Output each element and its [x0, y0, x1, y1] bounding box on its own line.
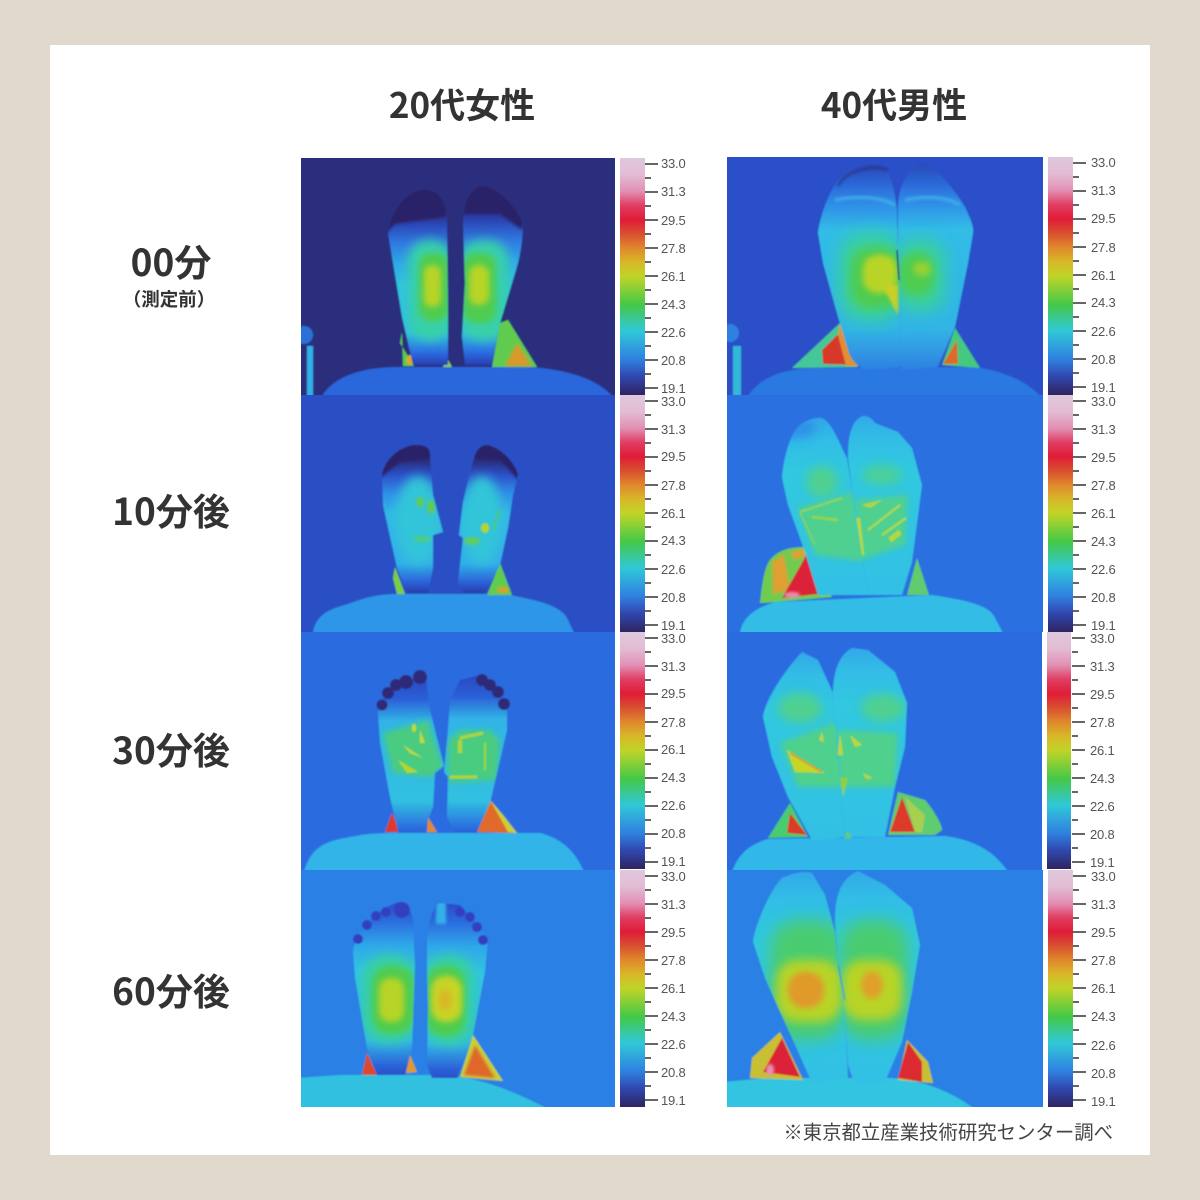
- scale: man 10 min: 20.8: [1091, 590, 1116, 605]
- scale: man 60 min: 19.1: [1091, 1094, 1116, 1109]
- row label: 60 min: 60分後: [112, 962, 230, 1016]
- scale: woman 00 min: 22.6: [661, 325, 686, 340]
- scale: woman 60 min: 24.3: [661, 1009, 686, 1024]
- scale: woman 30 min: 27.8: [661, 715, 686, 730]
- scale: woman 10 min: [620, 394, 686, 633]
- scale: woman 00 min: 31.3: [661, 184, 686, 199]
- scale: man 30 min: 26.1: [1090, 743, 1115, 758]
- scale: man 30 min: 22.6: [1090, 799, 1115, 814]
- thermal image: man 00 min: [720, 150, 1050, 400]
- scale: woman 30 min: [620, 631, 686, 869]
- scale: man 60 min: 29.5: [1091, 925, 1116, 940]
- scale: woman 60 min: 27.8: [661, 953, 686, 968]
- scale: woman 30 min: 19.1: [661, 854, 686, 869]
- scale: man 10 min: [1048, 394, 1116, 633]
- scale: man 10 min: 33.0: [1091, 394, 1116, 409]
- scale: man 00 min: 27.8: [1091, 240, 1116, 255]
- scale: woman 10 min: 26.1: [661, 506, 686, 521]
- scale: man 00 min: 24.3: [1091, 295, 1116, 310]
- scale: woman 60 min: 22.6: [661, 1037, 686, 1052]
- scale: man 10 min: 31.3: [1091, 422, 1116, 437]
- scale: man 30 min: 24.3: [1090, 771, 1115, 786]
- scale: man 00 min: 20.8: [1091, 352, 1116, 367]
- scale: man 10 min: 29.5: [1091, 450, 1116, 465]
- scale: man 30 min: 31.3: [1090, 659, 1115, 674]
- scale: man 60 min: 20.8: [1091, 1066, 1116, 1081]
- scale: woman 30 min: 26.1: [661, 742, 686, 757]
- scale: woman 00 min: 27.8: [661, 241, 686, 256]
- scale: woman 00 min: 24.3: [661, 297, 686, 312]
- scale: man 10 min: 26.1: [1091, 506, 1116, 521]
- scale: woman 60 min: 29.5: [661, 925, 686, 940]
- scale: man 00 min: 33.0: [1091, 155, 1116, 170]
- scale: man 60 min: 31.3: [1091, 897, 1116, 912]
- thermal image: man 30 min: [720, 628, 1050, 873]
- scale: man 60 min: 33.0: [1091, 869, 1116, 884]
- scale: woman 00 min: 19.1: [661, 381, 686, 396]
- column heading: 20s woman: 20代女性: [389, 78, 535, 129]
- scale: woman 60 min: 19.1: [661, 1093, 686, 1108]
- scale: man 60 min: [1048, 869, 1116, 1109]
- row label: 00 min (before measurement): 00分: [131, 233, 211, 287]
- scale: woman 10 min: 20.8: [661, 590, 686, 605]
- scale: woman 60 min: 33.0: [661, 869, 686, 884]
- row label: 30 min: 30分後: [112, 721, 230, 775]
- scale: man 10 min: 19.1: [1091, 618, 1116, 633]
- scale: woman 10 min: 19.1: [661, 618, 686, 633]
- scale: woman 10 min: 33.0: [661, 394, 686, 409]
- scale: woman 30 min: 31.3: [661, 659, 686, 674]
- scale: man 60 min: 22.6: [1091, 1038, 1116, 1053]
- row label: 10 min: 10分後: [112, 482, 230, 536]
- scale: woman 30 min: 29.5: [661, 686, 686, 701]
- scale: woman 60 min: [620, 869, 686, 1108]
- thermal image: woman 30 min: [295, 628, 625, 873]
- thermal image: man 10 min: [720, 390, 1050, 640]
- scale: woman 10 min: 31.3: [661, 422, 686, 437]
- scale: man 30 min: 19.1: [1090, 855, 1115, 870]
- scale: woman 00 min: 33.0: [661, 156, 686, 171]
- scale: woman 10 min: 24.3: [661, 533, 686, 548]
- scale: woman 30 min: 33.0: [661, 631, 686, 646]
- source note: ※東京都立産業技術研究センター調べ: [783, 1116, 1113, 1145]
- scale: man 30 min: 33.0: [1090, 631, 1115, 646]
- scale: woman 00 min: [620, 156, 686, 396]
- scale: woman 30 min: 22.6: [661, 798, 686, 813]
- scale: woman 30 min: 24.3: [661, 770, 686, 785]
- thermal image: woman 00 min: [295, 150, 625, 400]
- row label: 00 min (before measurement): [123, 233, 215, 312]
- scale: man 60 min: 24.3: [1091, 1009, 1116, 1024]
- thermal image: man 60 min: [720, 866, 1050, 1111]
- scale: woman 60 min: 20.8: [661, 1065, 686, 1080]
- thermal image: woman 60 min: [295, 866, 625, 1111]
- scale: man 00 min: 22.6: [1091, 324, 1116, 339]
- scale: woman 30 min: 20.8: [661, 826, 686, 841]
- scale: woman 60 min: 31.3: [661, 897, 686, 912]
- row label: 00 min (before measurement): （測定前）: [123, 286, 215, 312]
- scale: man 00 min: 31.3: [1091, 183, 1116, 198]
- scale: man 00 min: 19.1: [1091, 380, 1116, 395]
- scale: woman 00 min: 26.1: [661, 269, 686, 284]
- scale: man 00 min: [1048, 155, 1116, 395]
- scale: man 60 min: 27.8: [1091, 953, 1116, 968]
- scale: man 30 min: 20.8: [1090, 827, 1115, 842]
- scale: woman 10 min: 29.5: [661, 449, 686, 464]
- scale: man 30 min: [1047, 631, 1115, 870]
- scale: man 30 min: 27.8: [1090, 715, 1115, 730]
- scale: woman 10 min: 27.8: [661, 478, 686, 493]
- scale: man 30 min: 29.5: [1090, 687, 1115, 702]
- scale: man 00 min: 26.1: [1091, 268, 1116, 283]
- thermal image: woman 10 min: [295, 390, 625, 640]
- column heading: 40s man: 40代男性: [821, 78, 967, 129]
- scale: man 10 min: 27.8: [1091, 478, 1116, 493]
- scale: woman 60 min: 26.1: [661, 981, 686, 996]
- scale: woman 00 min: 20.8: [661, 353, 686, 368]
- scale: man 00 min: 29.5: [1091, 211, 1116, 226]
- scale: woman 00 min: 29.5: [661, 213, 686, 228]
- scale: man 10 min: 24.3: [1091, 534, 1116, 549]
- scale: man 60 min: 26.1: [1091, 981, 1116, 996]
- scale: woman 10 min: 22.6: [661, 562, 686, 577]
- scale: man 10 min: 22.6: [1091, 562, 1116, 577]
